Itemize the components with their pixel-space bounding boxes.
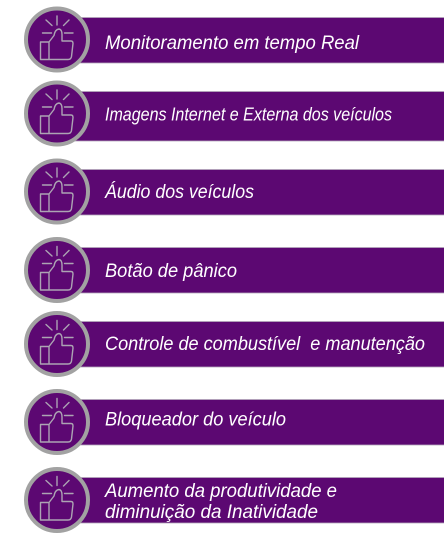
icon: thumbs up badge <box>26 391 88 453</box>
bar <box>70 478 444 523</box>
bar <box>70 248 444 293</box>
label: Botão de pânico <box>105 260 237 282</box>
bar <box>70 400 444 445</box>
item: Aumento da produtividade e diminuição da Inatividade <box>26 469 444 531</box>
icon: thumbs up badge <box>26 160 88 222</box>
bar <box>70 18 444 63</box>
icon: thumbs up badge <box>26 82 88 144</box>
item: Controle de combustível e manutenção <box>26 313 444 375</box>
label line 2: diminuição da Inatividade <box>105 501 318 523</box>
icon: thumbs up badge <box>26 313 88 375</box>
bar <box>70 92 444 141</box>
label: Bloqueador do veículo <box>105 408 286 430</box>
item: Bloqueador do veículo <box>26 391 444 453</box>
label: Áudio dos veículos <box>104 180 254 203</box>
icon: thumbs up badge <box>26 239 88 301</box>
bar <box>70 322 444 367</box>
bar <box>70 170 444 215</box>
item: Monitoramento em tempo Real <box>26 8 444 70</box>
icon: thumbs up badge <box>26 8 88 70</box>
label: Controle de combustível e manutenção <box>105 333 425 355</box>
item: Botão de pânico <box>26 239 444 301</box>
label line 1: Aumento da produtividade e <box>104 480 337 502</box>
label: Monitoramento em tempo Real <box>105 32 360 54</box>
item: Áudio dos veículos <box>26 160 444 222</box>
label: Imagens Internet e Externa dos veículos <box>105 104 392 124</box>
item: Imagens Internet e Externa dos veículos <box>26 82 444 144</box>
icon: thumbs up badge <box>26 469 88 531</box>
